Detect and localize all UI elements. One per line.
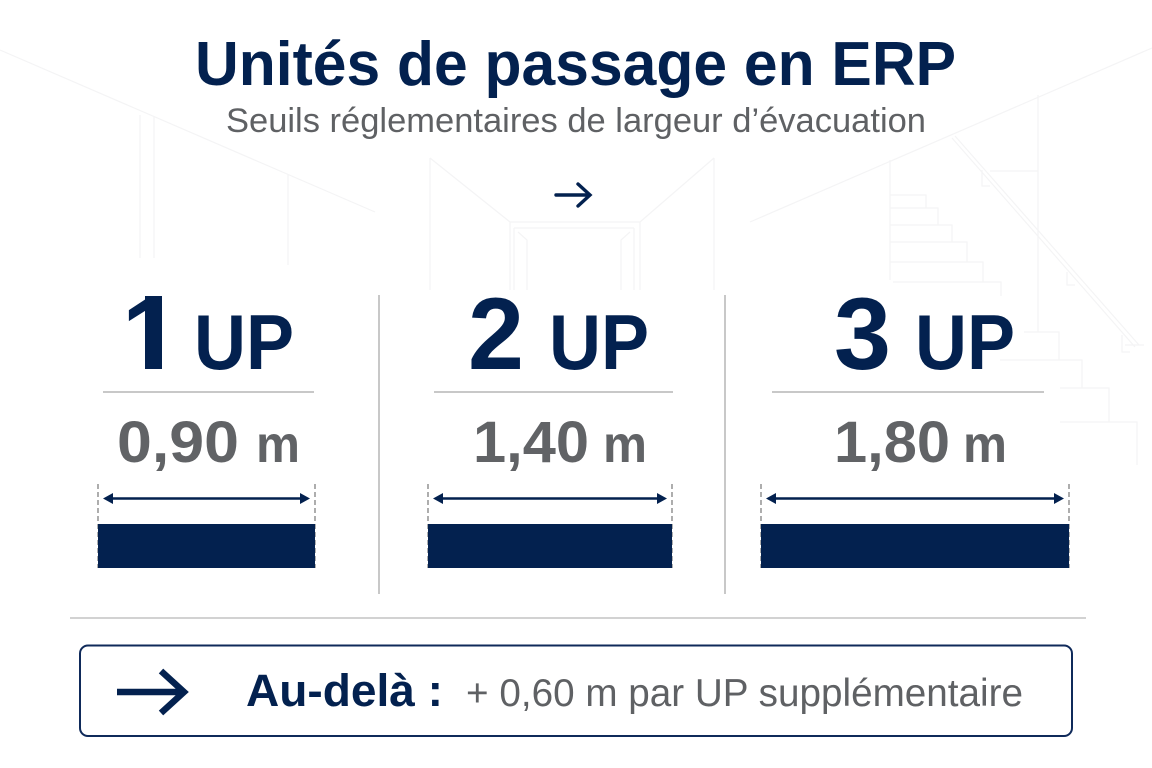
- label: 2 UP: [468, 277, 649, 391]
- width bar: [761, 524, 1069, 568]
- value: 0,90 m: [117, 410, 300, 475]
- label: 3 UP: 3: [834, 277, 891, 391]
- panel: 2 UP: [428, 277, 673, 568]
- label: 3 UP: UP: [915, 298, 1015, 386]
- label: 2 UP: UP: [549, 298, 649, 386]
- label: 2 UP: 2: [468, 277, 524, 391]
- callout: [80, 646, 1072, 736]
- subtitle: Seuils réglementaires de largeur d’évacuation: [226, 102, 926, 140]
- label: 1 UP: 1: [122, 277, 178, 391]
- value: 1,40 m: m: [603, 416, 647, 474]
- divider: [70, 617, 1086, 619]
- icon: arrow: [117, 671, 184, 713]
- value: 1,40 m: 1,40: [473, 410, 589, 475]
- width bar: [98, 524, 315, 568]
- panel: 3 UP: [761, 277, 1069, 568]
- value: 1,40 m: [473, 410, 647, 475]
- callout label: Au-delà :: [246, 665, 443, 716]
- panel: 1 UP: [98, 277, 315, 568]
- callout text: + 0,60 m par UP supplémentaire: [466, 672, 1023, 715]
- value: 1,80 m: 1,80: [834, 410, 950, 475]
- value: 1,80 m: [834, 410, 1007, 475]
- label: 3 UP: [834, 277, 1015, 391]
- divider: [724, 295, 726, 594]
- value: 0,90 m: m: [256, 416, 300, 474]
- title: Unités de passage en ERP: [195, 30, 956, 99]
- label: 1 UP: UP: [194, 298, 294, 386]
- background: faint architectural sketch: [0, 48, 1152, 465]
- divider: [378, 295, 380, 594]
- value: 1,80 m: m: [963, 416, 1007, 474]
- label: 1 UP: [128, 296, 292, 370]
- width arrow: [428, 484, 672, 568]
- width arrow: [98, 484, 315, 568]
- value: 0,90 m: 0,90: [117, 410, 239, 475]
- width bar: [428, 524, 672, 568]
- icon: small arrow: [556, 184, 590, 206]
- width arrow: [761, 484, 1069, 568]
